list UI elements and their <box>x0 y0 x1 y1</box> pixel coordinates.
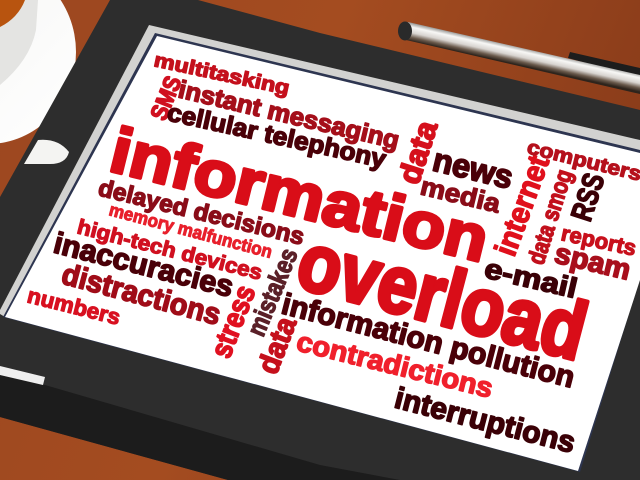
word: data smog: data smog <box>523 166 578 268</box>
stylus pen <box>398 22 640 94</box>
word: information: information <box>104 114 496 276</box>
word: distractions: distractions <box>58 258 224 332</box>
word: news: news <box>429 141 517 196</box>
word: memory malfunction: memory malfunction <box>107 200 274 262</box>
word: multitasking: multitasking <box>152 49 291 100</box>
word: e-mail: e-mail <box>482 253 580 304</box>
word: information pollution: information pollution <box>278 288 578 395</box>
word: stress: stress <box>205 281 262 363</box>
word: data lower: data <box>252 312 303 379</box>
word: RSS: RSS <box>565 169 611 225</box>
word: computers: computers <box>525 136 640 186</box>
word: contradictions: contradictions <box>294 326 496 404</box>
word: delayed decisions: delayed decisions <box>96 175 307 251</box>
word: interruptions: interruptions <box>391 382 579 460</box>
case side sliver <box>0 366 45 385</box>
tea cup <box>0 0 38 85</box>
word: SMS: SMS <box>146 72 187 124</box>
word: reports: reports <box>559 220 638 261</box>
word: data upper: data <box>391 116 445 188</box>
word: high-tech devices: high-tech devices <box>75 216 265 285</box>
saucer <box>0 0 76 144</box>
word: media: media <box>418 171 504 219</box>
word: numbers: numbers <box>25 283 123 330</box>
word: internet: internet <box>488 151 556 260</box>
word: mistakes: mistakes <box>241 244 304 340</box>
word: cellular telephony: cellular telephony <box>165 99 389 174</box>
word: inaccuracies: inaccuracies <box>50 227 237 304</box>
case lower fold <box>0 375 400 480</box>
word: spam: spam <box>551 238 634 287</box>
case finger notch showing saucer <box>24 140 69 164</box>
word: overload: overload <box>288 215 596 378</box>
word: instant messaging: instant messaging <box>176 76 402 155</box>
